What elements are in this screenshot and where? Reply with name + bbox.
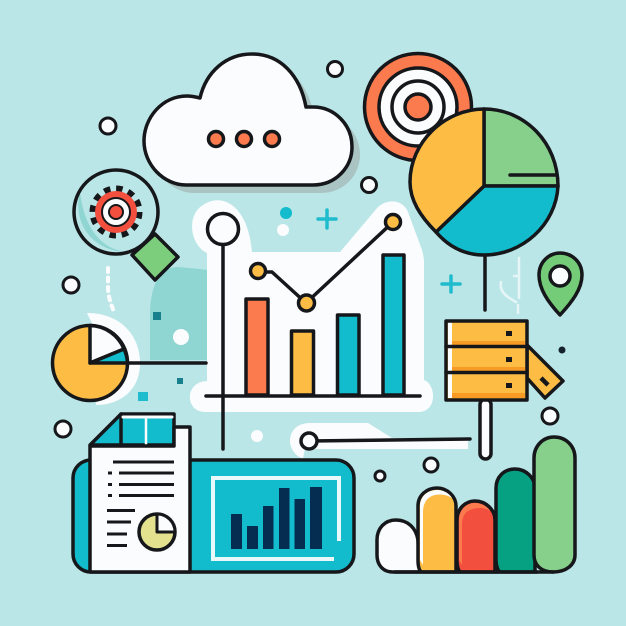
icon: document with folder tab — [90, 414, 190, 572]
icon: cloud — [144, 54, 360, 193]
panel: teal background blob — [150, 267, 208, 360]
chart: small pie with leader line — [52, 326, 206, 400]
panel: white halo behind small pie — [87, 313, 140, 405]
panel: white halo behind connector line — [290, 423, 468, 458]
panel: white halo behind bar chart — [190, 200, 433, 412]
panel: teal tablet with bar chart — [73, 460, 354, 572]
icon: magnifier with gear — [74, 170, 178, 280]
chart: central bar chart with trend line — [206, 214, 420, 449]
icon: target — [364, 54, 472, 160]
icon: server stack with tag — [446, 321, 563, 459]
small outlined circles — [55, 62, 558, 481]
chart: rounded column bars — [377, 437, 575, 572]
icon: white dashed trail — [108, 268, 114, 312]
connector line with node — [301, 433, 470, 449]
icon: map pin — [539, 253, 582, 315]
decorative squares and dots — [138, 207, 566, 442]
chart: large pie — [410, 109, 558, 310]
